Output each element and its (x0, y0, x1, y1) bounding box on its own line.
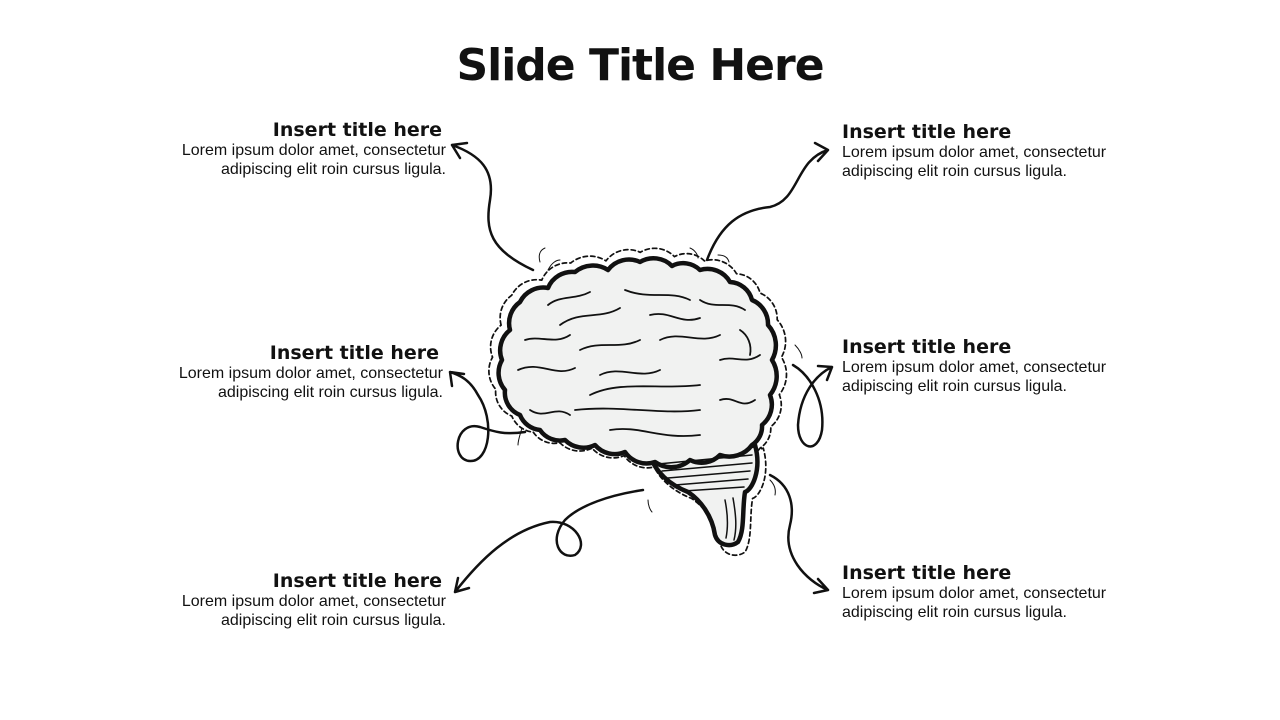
text block: middle left: Lorem ipsum dolor amet, consectetur (179, 365, 443, 382)
text block: middle right (842, 336, 1106, 395)
motion lines (518, 248, 802, 512)
text block: top right: adipiscing elit roin cursus ligula. (842, 163, 1067, 180)
text block: middle left: adipiscing elit roin cursus ligula. (218, 384, 443, 401)
text block: top left: Insert title here (273, 119, 442, 141)
text block: middle left (179, 342, 443, 401)
text block: bottom left: Insert title here (273, 570, 442, 592)
text block: top right: Insert title here (842, 121, 1011, 143)
text block: bottom left: adipiscing elit roin cursus ligula. (221, 612, 446, 629)
text block: middle right: Lorem ipsum dolor amet, consectetur (842, 359, 1106, 376)
text block: top left: Lorem ipsum dolor amet, consectetur (182, 142, 446, 159)
text block: top right (842, 121, 1106, 180)
arrow: top left (452, 143, 533, 270)
text block: bottom right: Lorem ipsum dolor amet, consectetur (842, 585, 1106, 602)
text block: middle left: Insert title here (270, 342, 439, 364)
arrow: top right (707, 143, 828, 260)
arrows (450, 143, 832, 593)
text block: middle right: Insert title here (842, 336, 1011, 358)
text block: top left: adipiscing elit roin cursus ligula. (221, 161, 446, 178)
cerebellum stripes (658, 455, 752, 540)
title: Slide Title Here (456, 40, 824, 91)
arrow: middle right (793, 365, 832, 446)
arrow: bottom left (455, 490, 643, 592)
text block: top right: Lorem ipsum dolor amet, consectetur (842, 144, 1106, 161)
arrow: middle left (450, 372, 525, 461)
arrow: bottom right (770, 475, 828, 593)
text block: middle right: adipiscing elit roin cursus ligula. (842, 378, 1067, 395)
icon: brain (489, 248, 802, 555)
folds (518, 290, 760, 436)
text block: top left (182, 119, 446, 178)
text block: bottom right: adipiscing elit roin cursus ligula. (842, 604, 1067, 621)
text block: bottom right (842, 562, 1106, 621)
text block: bottom left: Lorem ipsum dolor amet, consectetur (182, 593, 446, 610)
text block: bottom left (182, 570, 446, 629)
text block: bottom right: Insert title here (842, 562, 1011, 584)
